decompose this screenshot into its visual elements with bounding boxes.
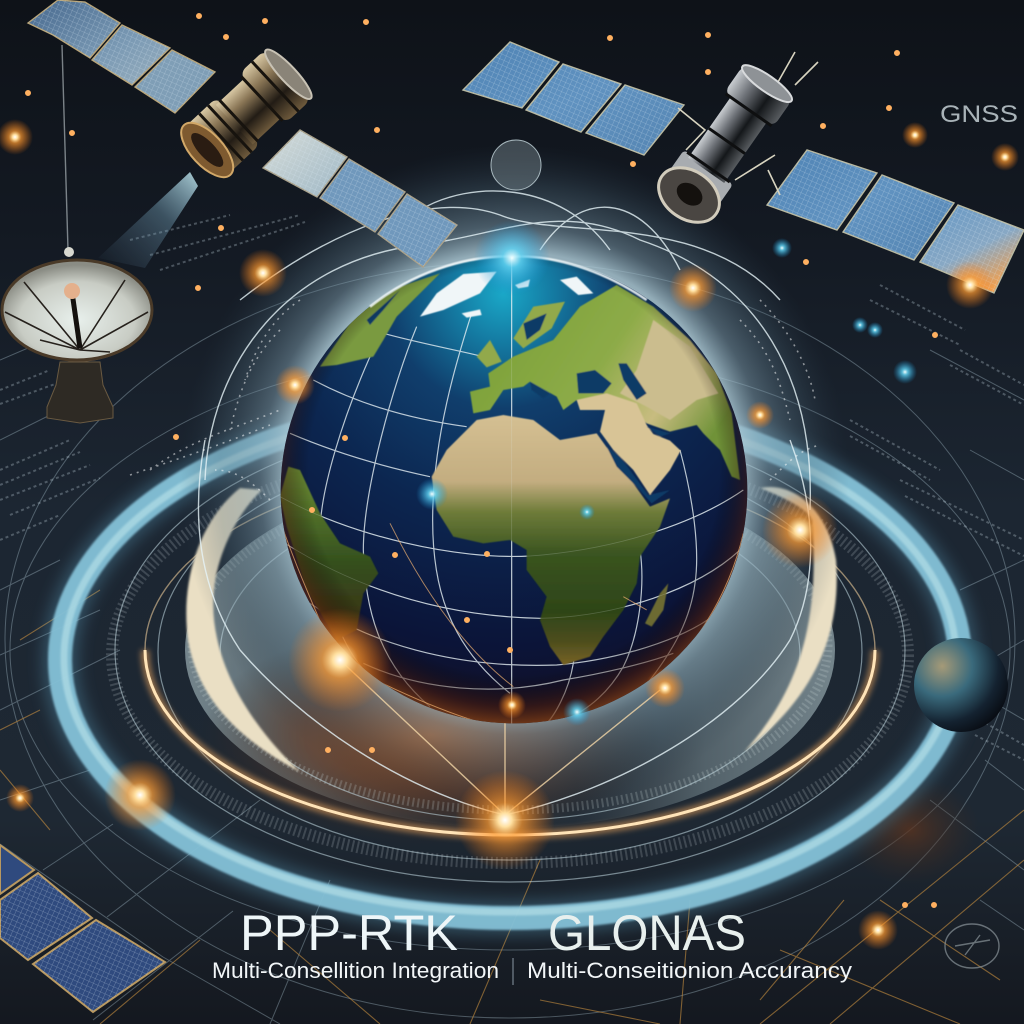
solar panel array: left satellite upper (28, 0, 215, 113)
bright top edge (370, 257, 647, 307)
anatolia and arabia (577, 393, 681, 495)
perspective grid floor (0, 262, 1024, 1024)
solar panel array: right satellite right (767, 150, 1024, 293)
europe and asia (470, 285, 740, 480)
inland seas (367, 290, 693, 503)
outer blue orbit ring (60, 402, 960, 918)
faint grid over land (280, 352, 744, 724)
north america (320, 273, 440, 367)
mesh band rings (112, 447, 908, 863)
graticule over ocean (280, 257, 743, 723)
label: GNSS: GNSS (940, 101, 1018, 128)
madagascar (645, 583, 668, 627)
solar panel array: right satellite left (463, 42, 684, 155)
cream inner ring crescents (186, 487, 837, 772)
solar panel array: left satellite lower (263, 130, 457, 267)
continents (280, 272, 740, 665)
africa (432, 415, 670, 665)
gold orbit ring (145, 465, 875, 835)
subtitle: integration: Multi-Consellition Integration (212, 958, 499, 983)
label: GLONAS: GLONAS (548, 905, 746, 961)
sparkle texture in haze (130, 300, 820, 500)
orange traces on lower globe (283, 523, 743, 723)
lit rim of globe (281, 257, 747, 723)
satellite: right body (648, 52, 818, 234)
subtitle: accuracy: Multi-Conseitionion Accurancy (527, 958, 852, 983)
warm patch on floor (840, 775, 980, 885)
satellite: left body (172, 44, 317, 186)
small floating globe bubble (491, 140, 541, 190)
ocean sphere (281, 257, 747, 723)
signal traces around globe (62, 45, 811, 815)
data tiles on floor (0, 215, 1024, 760)
haze behind globe (179, 145, 849, 815)
ground station dish (2, 247, 152, 423)
blue flares (416, 220, 917, 726)
central asia desert (620, 320, 718, 420)
thin orbit rings (115, 418, 905, 882)
gold floor lines (0, 590, 1024, 1024)
solar panels: bottom left (0, 845, 165, 1012)
globe (280, 257, 747, 723)
ring marker: bottom right (945, 924, 999, 968)
label: PPP-RTK: PPP-RTK (240, 905, 458, 961)
glass disc inside inner ring (185, 472, 835, 828)
small planet on ring (914, 638, 1008, 732)
greenland and arctic ice (420, 272, 593, 318)
scandinavia and british isles (477, 302, 565, 367)
small orange star dots (28, 16, 935, 905)
signal beam from left satellite (98, 172, 198, 268)
warm glow under globe (200, 625, 660, 845)
south america (280, 467, 378, 640)
